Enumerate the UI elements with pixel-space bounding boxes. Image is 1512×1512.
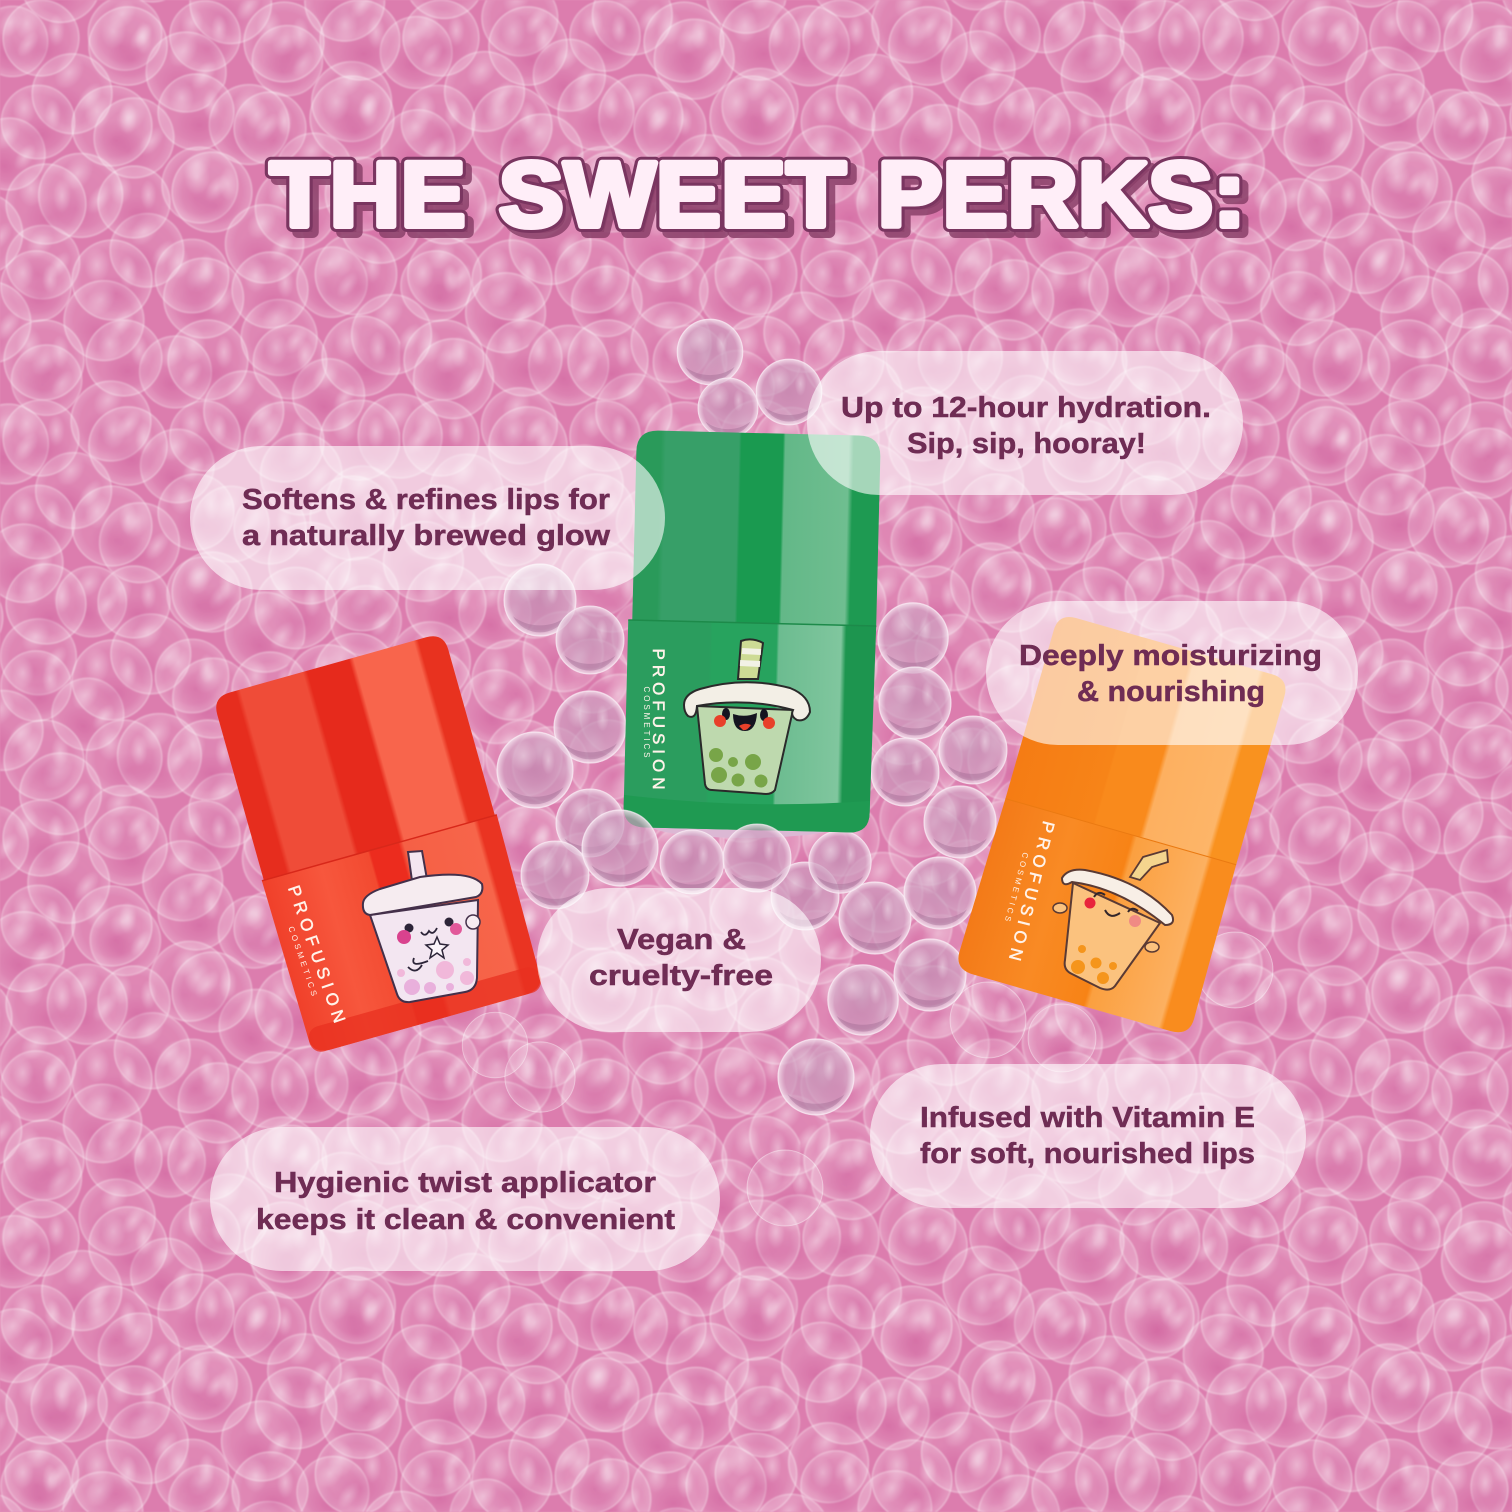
green sticker: smiling cup <box>684 639 810 794</box>
title: THE <box>276 149 471 252</box>
perk pill: vitamin E: for soft, nourished lips <box>920 1138 1255 1170</box>
product: red lip balm <box>210 632 546 1055</box>
perk pill: vegan: Vegan & <box>617 924 746 956</box>
title: SWEET <box>499 143 845 246</box>
title <box>270 143 1252 252</box>
orange bottle body <box>954 613 1291 1036</box>
red bottle body <box>210 632 546 1055</box>
perk pill: vegan: cruelty-free <box>589 960 773 992</box>
perk pill: softens and refines: Softens & refines lips for <box>242 484 610 516</box>
title: THE <box>270 143 465 246</box>
title: THE <box>270 143 465 246</box>
red sticker: cup with star <box>363 851 482 1002</box>
clear beads behind products <box>497 319 1273 1035</box>
orange brand text: COSMETICS <box>1003 851 1030 922</box>
perk pill: twist applicator: Hygienic twist applicator <box>274 1167 656 1199</box>
perk pill: 12-hour hydration <box>807 351 1243 495</box>
green brand text: PROFUSION <box>649 648 668 790</box>
product: orange lip balm <box>954 613 1291 1036</box>
perk pill: twist applicator: keeps it clean & convenient <box>256 1204 675 1236</box>
perk pill: softens and refines <box>190 446 665 590</box>
perk pill: moisturizing: & nourishing <box>1077 676 1265 708</box>
green brand text: COSMETICS <box>642 686 651 758</box>
perk pill: moisturizing <box>986 601 1358 745</box>
title: PERKS: <box>884 149 1251 252</box>
title: PERKS: <box>878 143 1245 246</box>
clear beads in front of products <box>462 810 1096 1226</box>
title: PERKS: <box>878 143 1245 246</box>
perk pill: softens and refines: a naturally brewed glow <box>242 520 610 552</box>
perk pill: vitamin E: Infused with Vitamin E <box>920 1102 1255 1134</box>
title: SWEET <box>499 143 845 246</box>
orange brand text: PROFUSION <box>1005 819 1058 963</box>
perk pill: vegan <box>537 888 821 1032</box>
perk pill: vitamin E <box>870 1064 1306 1208</box>
title: SWEET <box>505 149 851 252</box>
red brand text: COSMETICS <box>286 925 319 997</box>
perk pill: moisturizing: Deeply moisturizing <box>1019 640 1322 672</box>
orange sticker: winking cup <box>1053 850 1173 990</box>
red brand text: PROFUSION <box>284 883 349 1025</box>
perk pill: 12-hour hydration: Up to 12-hour hydration. <box>841 392 1211 424</box>
green bottle body <box>623 430 881 833</box>
perk pill: twist applicator <box>210 1127 720 1271</box>
perk pill: 12-hour hydration: Sip, sip, hooray! <box>907 428 1146 460</box>
product: green lip balm <box>623 430 881 833</box>
